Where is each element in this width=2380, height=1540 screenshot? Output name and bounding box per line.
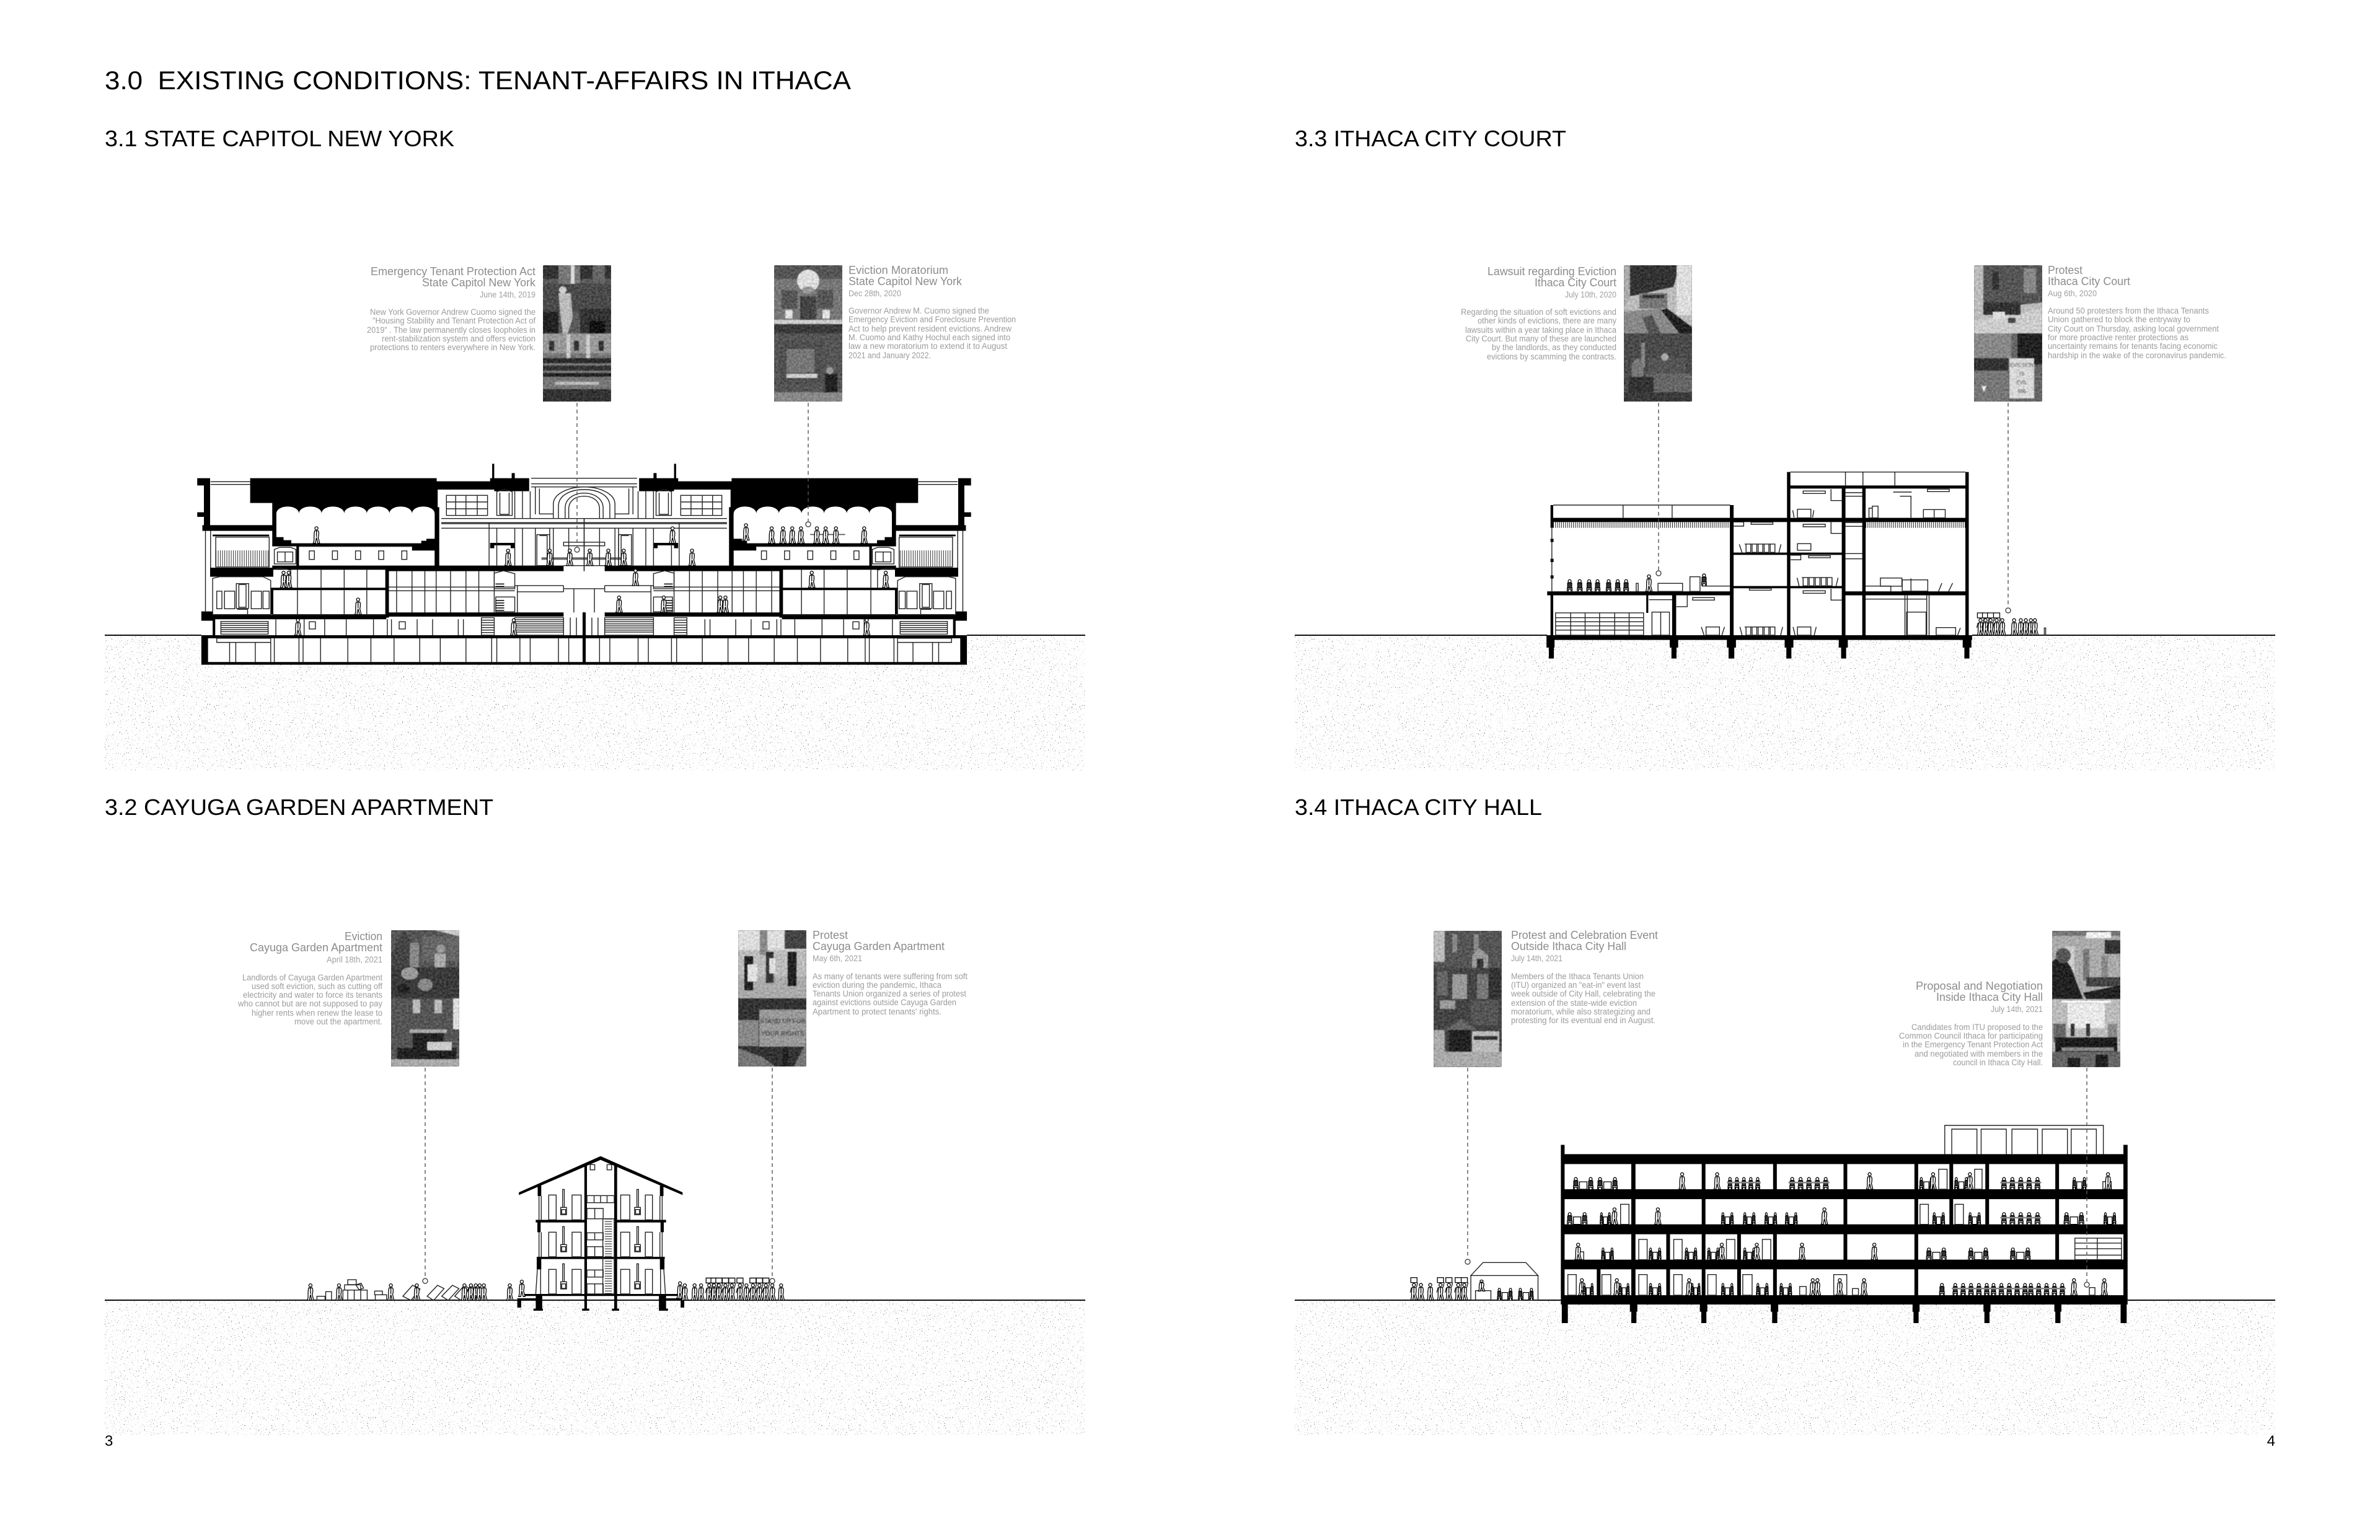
text: court protest: City Court on Thursday, asking local government bbox=[2048, 324, 2219, 333]
text: eviction moratorium: M. Cuomo and Kathy Hochul each signed into bbox=[848, 333, 1010, 342]
text: emergency tenant protection act: June 14th, 2019 bbox=[480, 290, 536, 299]
callout leader: cayuga protest bbox=[770, 1068, 775, 1283]
ground stipple 3.2 bbox=[105, 1300, 1085, 1435]
text: eviction moratorium: law a new moratorium to extend it to August bbox=[848, 341, 1007, 351]
text: eviction moratorium: 2021 and January 2022. bbox=[848, 351, 931, 360]
text: protest and celebration event: (ITU) organized an "eat-in" event last bbox=[1511, 980, 1641, 990]
text: cayuga protest: eviction during the pandemic, Ithaca bbox=[813, 980, 941, 990]
callout leader: eviction moratorium bbox=[806, 403, 811, 527]
text: cayuga eviction: used soft eviction, such as cutting off bbox=[252, 982, 382, 991]
text: court protest: Protest bbox=[2048, 264, 2082, 276]
photo: court protest collage: EVIL bbox=[2016, 380, 2027, 385]
photo: court protest collage: IS bbox=[2019, 371, 2024, 377]
text: lawsuit regarding eviction: by the landlords, as they conducted bbox=[1492, 343, 1616, 352]
callout leader: cayuga eviction bbox=[423, 1068, 428, 1283]
photo: moratorium signing collage bbox=[774, 265, 842, 402]
section drawing: state capitol bbox=[197, 464, 971, 665]
title: existing conditions: 3.0 EXISTING CONDITIONS: TENANT-AFFAIRS IN ITHACA bbox=[105, 66, 851, 95]
text: proposal and negotiation: in the Emergency Tenant Protection Act bbox=[1903, 1040, 2043, 1049]
text: cayuga protest: Cayuga Garden Apartment bbox=[813, 940, 945, 953]
text: court protest: for more proactive renter protections as bbox=[2048, 333, 2188, 342]
ground stipple 3.1 bbox=[105, 635, 1085, 770]
photo: cayuga eviction collage bbox=[391, 930, 459, 1067]
section drawing: cayuga garden apartment bbox=[307, 1156, 784, 1311]
text: cayuga protest: As many of tenants were suffering from soft bbox=[813, 972, 967, 981]
text: cayuga eviction: move out the apartment. bbox=[294, 1017, 382, 1026]
text: cayuga eviction: April 18th, 2021 bbox=[327, 955, 382, 964]
text: proposal and negotiation: Candidates from ITU proposed to the bbox=[1911, 1023, 2043, 1032]
text: lawsuit regarding eviction: Lawsuit regarding Eviction bbox=[1488, 265, 1616, 278]
text: eviction moratorium: Governor Andrew M. Cuomo signed the bbox=[848, 306, 989, 315]
heading 3.4: 3.4 ITHACA CITY HALL bbox=[1295, 794, 1542, 820]
text: eviction moratorium: Act to help prevent resident evictions. Andrew bbox=[848, 324, 1011, 333]
text: emergency tenant protection act: Emergency Tenant Protection Act bbox=[371, 265, 536, 278]
photo: court protest collage: 666 bbox=[2017, 389, 2026, 394]
text: proposal and negotiation: Inside Ithaca City Hall bbox=[1936, 991, 2043, 1003]
text: protest and celebration event: protesting for its eventual end in August. bbox=[1511, 1016, 1655, 1025]
text: eviction moratorium: State Capitol New York bbox=[848, 275, 963, 288]
text: cayuga eviction: Landlords of Cayuga Garden Apartment bbox=[242, 973, 382, 982]
text: proposal and negotiation bbox=[1899, 980, 2043, 1067]
text: protest and celebration event: extension of the state-wide eviction bbox=[1511, 998, 1637, 1008]
photo: court protest collage bbox=[1974, 265, 2042, 402]
page number 4: 4 bbox=[2267, 1433, 2275, 1450]
text: proposal and negotiation: July 14th, 2021 bbox=[1991, 1005, 2043, 1014]
text: protest and celebration event: Members of the Ithaca Tenants Union bbox=[1511, 972, 1644, 981]
text: emergency tenant protection act: New York Governor Andrew Cuomo signed the bbox=[370, 307, 536, 317]
text: eviction moratorium bbox=[848, 264, 1016, 360]
text: court protest: Around 50 protesters from the Ithaca Tenants bbox=[2048, 306, 2209, 315]
text: lawsuit regarding eviction bbox=[1461, 265, 1616, 361]
callout leader: court protest bbox=[2006, 403, 2011, 613]
callout leader: protest and celebration event bbox=[1465, 1068, 1470, 1264]
photo: courtroom collage bbox=[1624, 265, 1692, 402]
text: cayuga protest: against evictions outside Cayuga Garden bbox=[813, 998, 956, 1007]
text: protest and celebration event: July 14th, 2021 bbox=[1511, 954, 1562, 963]
heading 3.1: 3.1 STATE CAPITOL NEW YORK bbox=[105, 126, 454, 151]
text: protest and celebration event: Protest and Celebration Event bbox=[1511, 929, 1658, 941]
text: lawsuit regarding eviction: Ithaca City Court bbox=[1535, 276, 1616, 289]
text: cayuga eviction: higher rents when renew the lease to bbox=[252, 1008, 382, 1018]
text: protest and celebration event: week outside of City Hall, celebrating the bbox=[1510, 989, 1655, 998]
text: cayuga protest bbox=[813, 929, 967, 1016]
text: lawsuit regarding eviction: Regarding the situation of soft evictions and bbox=[1461, 307, 1616, 317]
text: emergency tenant protection act: State Capitol New York bbox=[422, 276, 536, 289]
text: cayuga protest: May 6th, 2021 bbox=[813, 954, 862, 963]
text: cayuga eviction: who cannot but are not supposed to pay bbox=[237, 999, 382, 1008]
text: cayuga eviction: electricity and water to force its tenants bbox=[243, 990, 382, 1000]
heading 3.3: 3.3 ITHACA CITY COURT bbox=[1295, 126, 1566, 151]
text: eviction moratorium: Emergency Eviction and Foreclosure Prevention bbox=[848, 315, 1016, 324]
section drawing: city court bbox=[1546, 472, 2046, 659]
text: cayuga protest: Protest bbox=[813, 929, 848, 941]
text: lawsuit regarding eviction: lawsuits within a year taking place in Ithaca bbox=[1465, 325, 1616, 335]
text: emergency tenant protection act bbox=[367, 265, 536, 352]
photo: city hall negotiation collage bbox=[2052, 931, 2120, 1067]
text: emergency tenant protection act: protections to renters everywhere in New York. bbox=[370, 343, 536, 352]
callout leader: proposal and negotiation bbox=[2084, 1068, 2089, 1287]
photo: cayuga protest collage: YOUR RIGHTS bbox=[761, 1031, 804, 1037]
text: lawsuit regarding eviction: July 10th, 2020 bbox=[1565, 290, 1616, 299]
text: lawsuit regarding eviction: other kinds of evictions, there are many bbox=[1478, 316, 1616, 325]
text: cayuga protest: Tenants Union organized a series of protest bbox=[813, 989, 966, 998]
photo: city hall celebration collage bbox=[1434, 931, 1502, 1067]
text: protest and celebration event: Outside Ithaca City Hall bbox=[1511, 940, 1626, 953]
callout leader: lawsuit regarding eviction bbox=[1656, 403, 1661, 576]
text: court protest bbox=[2048, 264, 2226, 360]
callout leader: emergency tenant protection act bbox=[575, 403, 580, 552]
text: proposal and negotiation: Proposal and Negotiation bbox=[1916, 980, 2043, 992]
text: court protest: hardship in the wake of the coronavirus pandemic. bbox=[2048, 351, 2226, 360]
text: proposal and negotiation: council in Ithaca City Hall. bbox=[1953, 1058, 2043, 1067]
page number 3: 3 bbox=[105, 1433, 113, 1450]
text: court protest: Union gathered to block the entryway to bbox=[2048, 315, 2190, 324]
text: protest and celebration event: moratorium, while also strategizing and bbox=[1511, 1007, 1651, 1016]
text: emergency tenant protection act: "Housing Stability and Tenant Protection Act of bbox=[372, 316, 536, 325]
text: eviction moratorium: Eviction Moratorium bbox=[848, 264, 948, 276]
ground stipple 3.4 bbox=[1295, 1300, 2275, 1435]
text: proposal and negotiation: Common Council Ithaca for participating bbox=[1899, 1031, 2043, 1041]
photo: assembly session collage bbox=[543, 265, 611, 402]
panel: 3.1 state capitol new york bbox=[105, 126, 1085, 770]
text: emergency tenant protection act: 2019" . The law permanently closes loopholes in bbox=[367, 325, 536, 335]
photo: court protest collage: EVICTION bbox=[2010, 363, 2034, 368]
heading 3.2: 3.2 CAYUGA GARDEN APARTMENT bbox=[105, 794, 493, 820]
text: court protest: uncertainty remains for tenants facing economic bbox=[2048, 341, 2218, 351]
text: emergency tenant protection act: rent-stabilization system and offers eviction bbox=[382, 334, 536, 343]
panel: 3.2 cayuga garden apartment bbox=[105, 794, 1085, 1435]
text: cayuga eviction: Cayuga Garden Apartment bbox=[250, 941, 382, 954]
panel: 3.3 ithaca city court bbox=[1295, 126, 2275, 770]
photo: cayuga protest collage: STAND UP FOR bbox=[760, 1018, 806, 1025]
text: cayuga eviction bbox=[237, 930, 382, 1026]
text: court protest: Ithaca City Court bbox=[2048, 275, 2130, 288]
text: eviction moratorium: Dec 28th, 2020 bbox=[848, 289, 901, 298]
text: court protest: Aug 6th, 2020 bbox=[2048, 289, 2097, 298]
text: proposal and negotiation: and negotiated with members in the bbox=[1915, 1049, 2043, 1058]
text: cayuga eviction: Eviction bbox=[345, 930, 382, 943]
text: lawsuit regarding eviction: City Court. But many of these are launched bbox=[1466, 334, 1616, 343]
text: cayuga protest: Apartment to protect tenants' rights. bbox=[813, 1007, 941, 1016]
panel: 3.4 ithaca city hall bbox=[1295, 794, 2275, 1435]
text: lawsuit regarding eviction: evictions by scamming the contracts. bbox=[1487, 352, 1616, 361]
text: protest and celebration event bbox=[1510, 929, 1658, 1025]
section drawing: city hall bbox=[1410, 1125, 2128, 1323]
photo: cayuga protest collage bbox=[738, 930, 806, 1067]
ground stipple 3.3 bbox=[1295, 635, 2275, 770]
